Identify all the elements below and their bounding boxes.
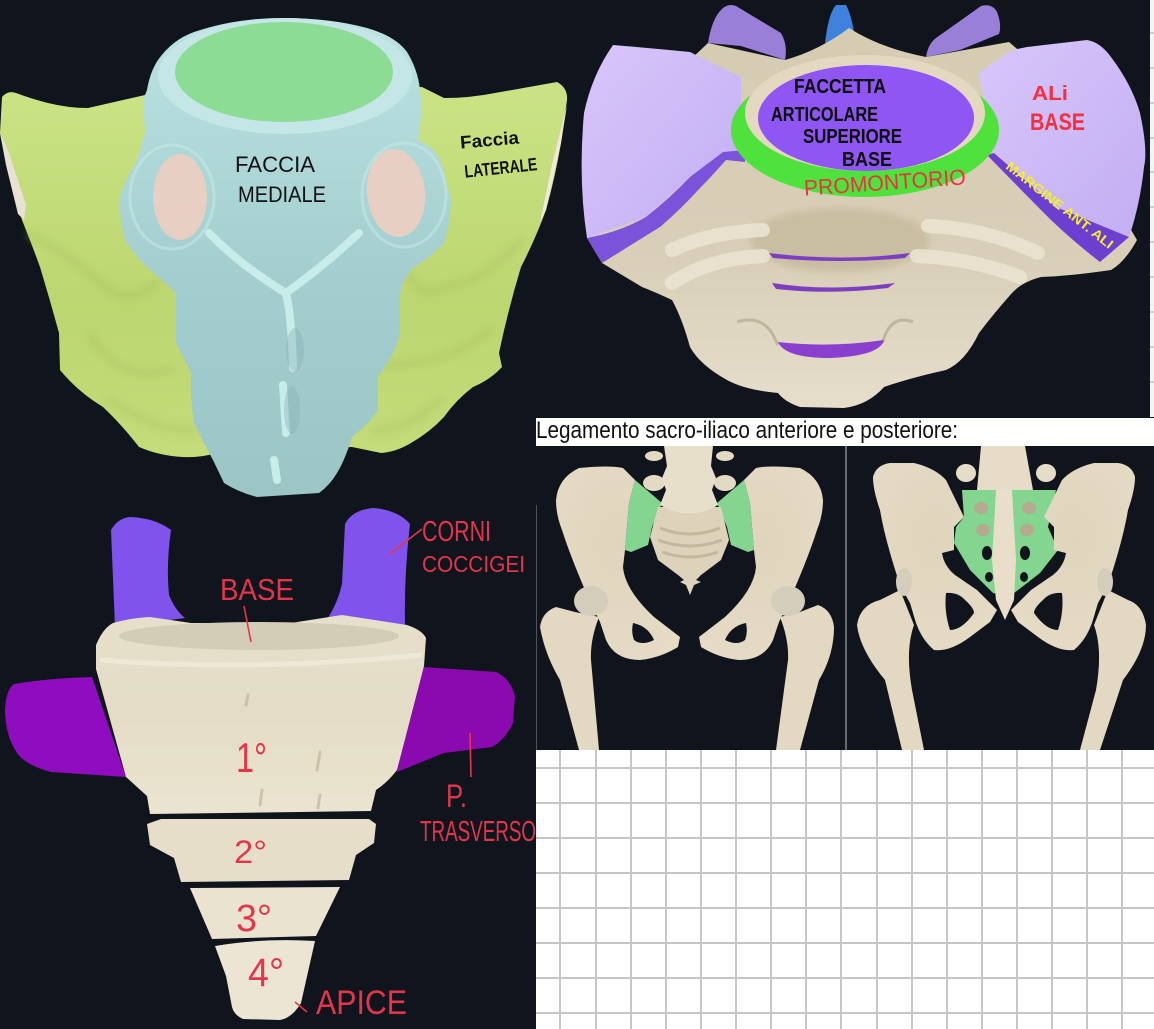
lower notch shapes — [737, 320, 913, 345]
label: p. trasverso: TRASVERSO — [420, 816, 536, 848]
posterior obturator foramen left — [946, 593, 974, 630]
label: faccia laterale — [459, 127, 538, 182]
pale rim around upper facet — [158, 18, 412, 134]
label: faccia laterale: LATERALE — [463, 154, 538, 182]
label: segment numbers: 3° — [236, 898, 272, 940]
label: faccetta articolare superiore base: FACCETTA — [794, 76, 886, 98]
base lip — [100, 655, 422, 665]
base surface — [119, 622, 399, 650]
label: segment numbers: 2° — [234, 834, 267, 870]
annotation strokes — [244, 529, 471, 1012]
lower sacral foramina — [982, 546, 1030, 582]
pale rings around auricular facets — [130, 143, 446, 249]
sacral midline crest — [992, 490, 1016, 620]
left transverse process — [5, 677, 126, 777]
posterior right hip bone — [1011, 463, 1135, 650]
sacral foramina — [974, 502, 1036, 536]
sacro-iliac ligament anterior right — [717, 480, 754, 552]
right superior process purple — [926, 5, 1000, 57]
lumbar transverse processes — [643, 451, 736, 491]
label: segment numbers — [234, 734, 284, 995]
third segment — [190, 887, 340, 939]
left superior process purple — [708, 5, 786, 60]
label: ali base: ALi — [1032, 83, 1068, 105]
panel: sacrum medial view — [0, 18, 567, 497]
right anterior margin purple band — [987, 153, 1129, 262]
label: margine anteriore ali: MARGINE ANT. ALI — [1003, 159, 1116, 252]
right edge ruler strip — [1150, 0, 1154, 417]
label: ali base: BASE — [1030, 109, 1085, 136]
first segment — [96, 615, 426, 814]
central tan shading — [750, 208, 930, 272]
panel: sacrum base view — [582, 5, 1145, 408]
label: corni coccigei: CORNI — [422, 516, 491, 548]
label: p. trasverso: P. — [446, 778, 467, 814]
white bone edge right — [540, 105, 567, 222]
posterior lumbar spine — [977, 446, 1033, 490]
Y ridge on medial surface — [209, 233, 359, 480]
posterior hip capsules — [896, 568, 1113, 596]
sacral line 2 — [772, 283, 895, 292]
sacral line 3 — [778, 340, 884, 358]
right ala lavender — [979, 40, 1145, 237]
posterior obturator foramen right — [1034, 593, 1062, 630]
white bone edge left — [0, 133, 26, 220]
fourth segment — [215, 940, 315, 1020]
heading band: Legamento sacro-iliaco anteriore e posteriore: — [536, 417, 958, 444]
posterior left femur — [857, 590, 924, 750]
wing shading creases — [30, 235, 520, 430]
first segment grooves — [246, 695, 320, 808]
label: faccia mediale: FACCIA — [235, 152, 315, 177]
second segment — [147, 819, 376, 882]
posterior left hip bone — [873, 463, 997, 650]
right transverse process — [397, 667, 515, 772]
label: base: BASE — [220, 572, 294, 607]
shaded sacral lumps — [284, 328, 304, 434]
sacrum bone body — [587, 28, 1137, 408]
posterior right femur — [1080, 590, 1146, 750]
right coccygeal cornu — [328, 508, 410, 625]
label: promontorio: PROMONTORIO — [803, 164, 967, 201]
left coccygeal cornu — [111, 517, 185, 627]
label: faccetta articolare superiore base: SUPERIORE — [803, 126, 902, 148]
label: ali base — [1030, 83, 1085, 136]
label: faccetta articolare superiore base — [771, 76, 902, 171]
label: apice: APICE — [316, 984, 407, 1022]
articular rim beige — [745, 55, 985, 171]
label: segment numbers: 1° — [236, 734, 267, 781]
label: corni coccigei — [422, 516, 525, 577]
obturator foramen right — [725, 623, 747, 643]
grid paper — [536, 750, 1154, 1029]
sacral segments shading — [658, 528, 722, 557]
label: faccia laterale: Faccia — [459, 127, 521, 153]
panel: posterior pelvis — [857, 446, 1146, 750]
lumbar vertebral bodies — [660, 446, 718, 514]
sacral line 1 — [769, 253, 910, 261]
posterior sacro-iliac ligament — [954, 490, 1058, 597]
panel divider — [845, 446, 847, 750]
medial surface in pale teal — [119, 18, 451, 497]
upper articular facet in green — [175, 22, 393, 122]
left panel edge line — [536, 505, 537, 750]
superior articular facet purple — [758, 65, 974, 171]
label: faccia mediale: MEDIALE — [238, 182, 326, 207]
anterior sacrum — [650, 507, 729, 595]
panel: coccyx anterior view — [5, 508, 536, 1022]
left femur — [540, 607, 599, 750]
left auricular facet — [153, 154, 207, 240]
posterior transverse processes — [956, 464, 1056, 482]
label: faccetta articolare superiore base: BASE — [842, 149, 892, 171]
left ala lavender — [582, 45, 741, 238]
label: faccia mediale — [235, 152, 326, 207]
promontory green rim — [731, 63, 999, 197]
obturator foramen left — [632, 623, 654, 643]
hip joint capsules — [574, 586, 805, 616]
right auricular facet — [363, 146, 429, 240]
left anterior margin purple band — [587, 150, 745, 263]
label: faccetta articolare superiore base: ARTICOLARE — [771, 104, 878, 126]
bone ridges — [672, 226, 1038, 283]
blue spinous tip — [825, 5, 854, 44]
label: segment numbers: 4° — [248, 951, 284, 995]
label: p. trasverso — [420, 778, 536, 848]
lateral wings in green — [0, 82, 567, 457]
label: corni coccigei: COCCIGEI — [422, 551, 525, 577]
panel: anterior pelvis — [540, 446, 834, 750]
anterior right hip bone — [699, 466, 823, 660]
sacro-iliac ligament anterior left — [625, 480, 662, 552]
right femur — [776, 605, 834, 750]
anterior left hip bone — [556, 466, 680, 660]
